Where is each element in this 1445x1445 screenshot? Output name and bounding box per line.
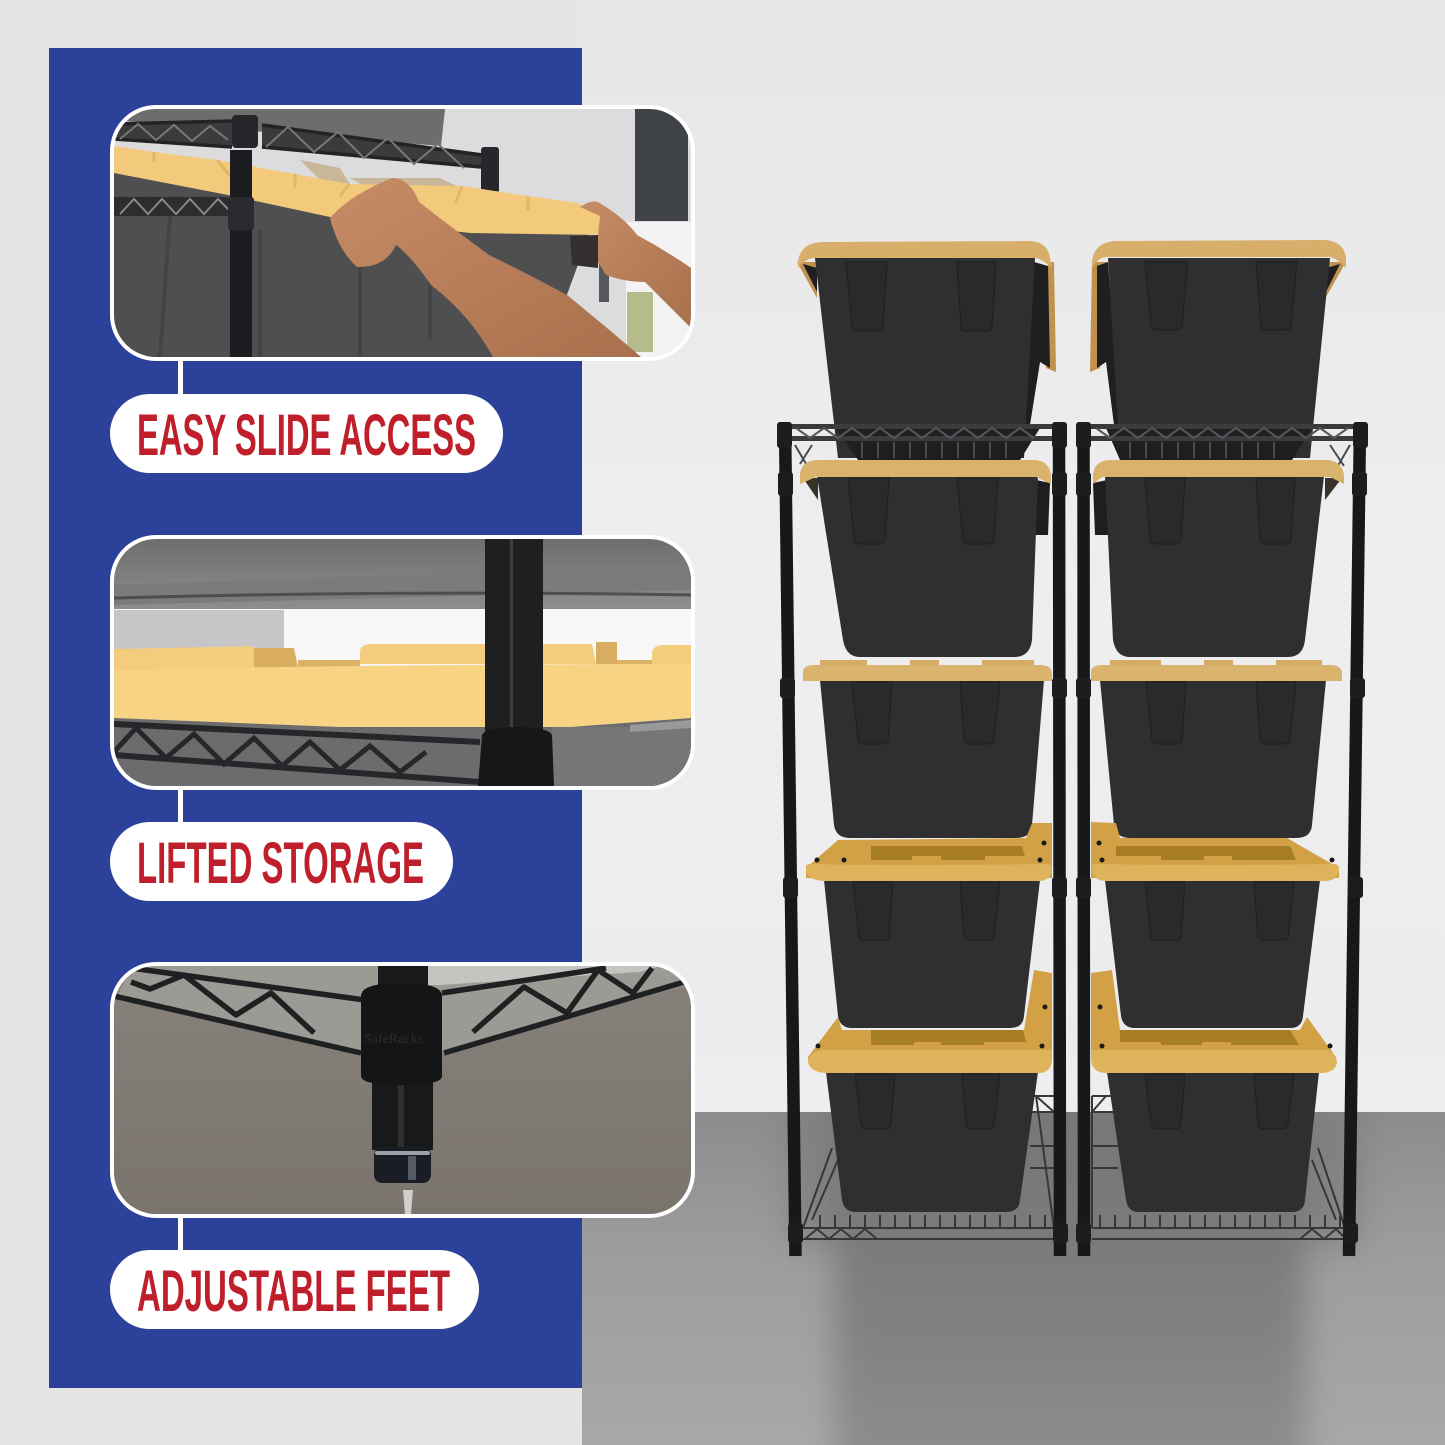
background: textured left margin bbox=[0, 0, 582, 1445]
pill label: easy slide access bbox=[110, 394, 503, 473]
wire rack bottom shelves bbox=[803, 1096, 1346, 1239]
storage bin: left row 4 bbox=[806, 823, 1052, 1028]
top wire shelf: right bbox=[1090, 425, 1355, 476]
storage bin: right row 5 bbox=[1091, 970, 1337, 1212]
storage bin: left row 2 bbox=[800, 460, 1051, 657]
photo panel: lifted storage bbox=[110, 535, 695, 790]
pill label: easy slide access: EASY SLIDE ACCESS bbox=[137, 403, 476, 468]
blue panel bbox=[49, 48, 582, 1388]
connector line 3 bbox=[178, 1216, 183, 1254]
rack posts and collars bbox=[777, 422, 1368, 1256]
pill label: adjustable feet: ADJUSTABLE FEET bbox=[137, 1259, 450, 1324]
storage bin: left row 3 bbox=[803, 660, 1052, 838]
photo panel: adjustable feet bbox=[110, 962, 695, 1218]
storage bin: right row 3 bbox=[1091, 660, 1342, 838]
pill label: lifted storage bbox=[110, 822, 453, 901]
photo panel: easy slide access bbox=[110, 105, 695, 361]
storage bin: left row 1 bbox=[797, 241, 1056, 458]
storage bin: right row 4 bbox=[1091, 822, 1339, 1028]
background: wall bbox=[582, 0, 1445, 1112]
pill label: adjustable feet bbox=[110, 1250, 479, 1329]
connector line 2 bbox=[178, 788, 183, 826]
pill label: lifted storage: LIFTED STORAGE bbox=[137, 831, 424, 896]
background: skirting board bbox=[582, 1056, 1445, 1112]
storage bin: right row 2 bbox=[1093, 460, 1344, 657]
top wire shelf: left bbox=[792, 425, 1054, 474]
connector line 1 bbox=[178, 358, 183, 398]
embossed brand on collar: SafeRacks bbox=[364, 1032, 423, 1047]
background: concrete floor bbox=[582, 1100, 1445, 1445]
storage bin: right row 1 bbox=[1090, 240, 1346, 458]
storage bin: left row 5 bbox=[808, 970, 1052, 1212]
